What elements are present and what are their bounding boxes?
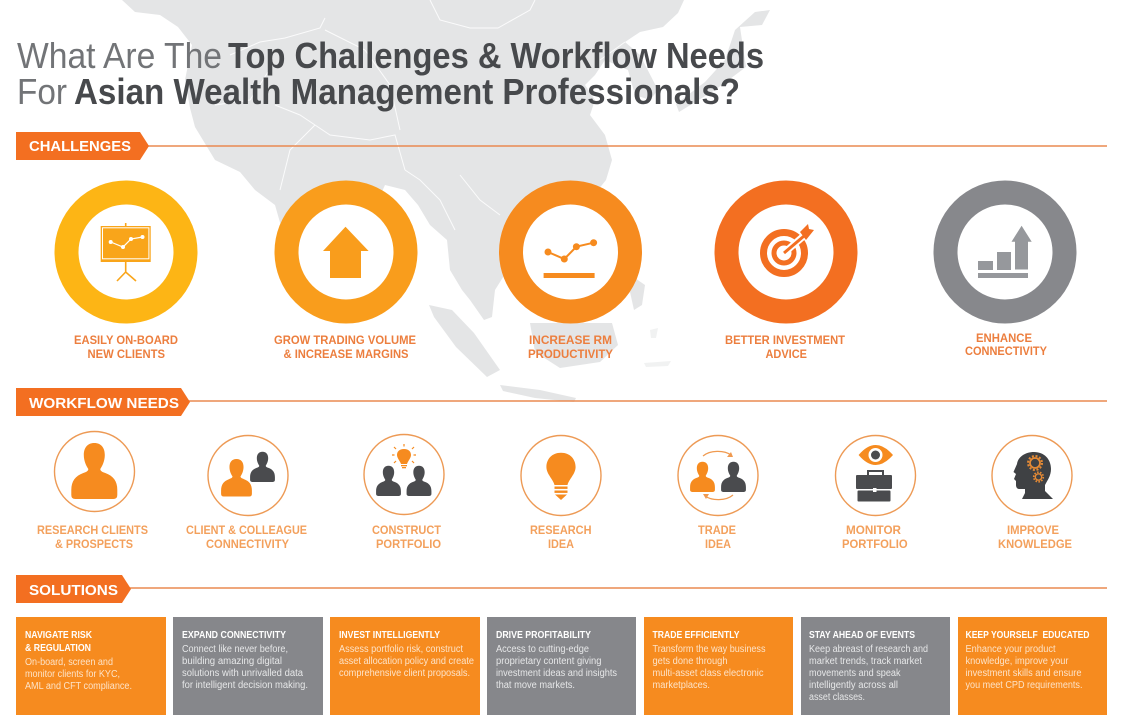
- workflow: improve knowledge: IMPROVE: [1007, 523, 1059, 537]
- panel: invest intelligently: asset allocation policy and create: [339, 656, 474, 667]
- panel: stay ahead of events: movements and speak: [809, 668, 901, 679]
- workflow: client and colleague connectivity: [186, 436, 307, 551]
- icon: two people: [221, 452, 275, 497]
- workflow: research clients and prospects: & PROSPECTS: [55, 537, 133, 551]
- panel: trade efficiently: multi-asset class electronic: [652, 668, 764, 679]
- title: Asian Wealth Management Professionals?: [74, 71, 740, 112]
- section heading: solutions: [16, 575, 1107, 603]
- title: What Are The: [17, 35, 222, 76]
- icon: eye over briefcase: [856, 445, 893, 502]
- workflow: trade idea: IDEA: [705, 537, 731, 551]
- section heading: solutions: SOLUTIONS: [29, 583, 118, 599]
- icon: light bulb: [546, 453, 576, 500]
- panel: trade efficiently: [644, 617, 793, 715]
- panel: expand connectivity: building amazing digital: [182, 656, 282, 667]
- workflow: client and colleague connectivity: CONNECTIVITY: [206, 537, 289, 551]
- panel: drive profitability: Access to cutting-edge: [496, 644, 589, 655]
- panel: navigate risk and regulation: NAVIGATE RISK: [25, 630, 93, 641]
- panel: keep yourself educated: you meet CPD requirements.: [966, 680, 1082, 691]
- panel: drive profitability: investment ideas and insights: [496, 668, 617, 679]
- panel: navigate risk and regulation: & REGULATION: [25, 643, 91, 654]
- title: For: [17, 71, 67, 112]
- panel: trade efficiently: marketplaces.: [652, 680, 710, 691]
- panel: keep yourself educated: [958, 617, 1107, 715]
- panel: drive profitability: that move markets.: [496, 680, 575, 691]
- map country borders: [215, 0, 625, 230]
- icon: presentation board: [101, 223, 151, 281]
- challenge 3: increase RM productivity: INCREASE RM: [529, 333, 612, 347]
- workflow: construct portfolio: [364, 434, 444, 551]
- workflow: trade idea: [678, 436, 758, 551]
- icon: two people exchanging: [690, 451, 746, 500]
- panel: invest intelligently: INVEST INTELLIGENTLY: [339, 630, 440, 641]
- panel: stay ahead of events: intelligently across all: [809, 680, 898, 691]
- icon: person: [71, 443, 117, 499]
- panel: trade efficiently: Transform the way business: [652, 644, 766, 655]
- panel: expand connectivity: solutions with unrivalled data: [182, 668, 303, 679]
- challenge 4: better investment advice: BETTER INVESTMENT: [725, 333, 846, 347]
- panel: stay ahead of events: market trends, track market: [809, 656, 922, 667]
- challenge 1: easily on-board new clients: [66, 192, 186, 361]
- challenge 2: grow trading volume: & INCREASE MARGINS: [284, 347, 408, 361]
- panel: stay ahead of events: asset classes.: [809, 692, 865, 703]
- title: Top Challenges & Workflow Needs: [228, 35, 764, 76]
- workflow: trade idea: TRADE: [698, 523, 736, 537]
- section heading: workflow needs: WORKFLOW NEEDS: [29, 396, 179, 412]
- workflow: monitor portfolio: PORTFOLIO: [842, 537, 908, 551]
- section heading: challenges: CHALLENGES: [29, 139, 131, 155]
- workflow: research idea: IDEA: [548, 537, 574, 551]
- workflow: research idea: [521, 436, 601, 551]
- icon: rising bars: [978, 226, 1032, 278]
- workflow: monitor portfolio: MONITOR: [846, 523, 901, 537]
- workflow: improve knowledge: [992, 436, 1072, 551]
- challenge 4: better investment advice: ADVICE: [766, 347, 807, 361]
- challenge 1: easily on-board new clients: NEW CLIENTS: [88, 347, 165, 361]
- panel: trade efficiently: gets done through: [652, 656, 728, 667]
- icon: two people with light bulb: [376, 444, 431, 496]
- workflow: research clients and prospects: [37, 432, 148, 551]
- workflow: client and colleague connectivity: CLIENT & COLLEAGUE: [186, 523, 307, 537]
- workflow: research clients and prospects: RESEARCH CLIENTS: [37, 523, 148, 537]
- panel: navigate risk and regulation: On-board, screen and: [25, 657, 113, 668]
- challenge 2: grow trading volume: [274, 192, 416, 361]
- icon: target with arrow: [764, 224, 814, 274]
- panel: stay ahead of events: [801, 617, 950, 715]
- panel: navigate risk and regulation: monitor clients for KYC,: [25, 669, 120, 680]
- panel: expand connectivity: [173, 617, 323, 715]
- icon: up arrow: [323, 227, 369, 278]
- panel: keep yourself educated: KEEP YOURSELF EDUCATED: [966, 630, 1090, 641]
- icon: head with gears: [1014, 452, 1053, 499]
- workflow: construct portfolio: PORTFOLIO: [376, 537, 441, 551]
- panel: stay ahead of events: Keep abreast of research and: [809, 644, 928, 655]
- challenge 3: increase RM productivity: PRODUCTIVITY: [528, 347, 613, 361]
- challenge 5: enhance connectivity: CONNECTIVITY: [965, 344, 1047, 358]
- panel: expand connectivity: EXPAND CONNECTIVITY: [182, 630, 286, 641]
- panel: keep yourself educated: investment skills and ensure: [966, 668, 1082, 679]
- challenge 4: better investment advice: [725, 192, 846, 361]
- panel: invest intelligently: [330, 617, 480, 715]
- section heading: challenges: [16, 132, 1107, 160]
- panel: expand connectivity: for intelligent decision making.: [182, 680, 308, 691]
- challenge 2: grow trading volume: GROW TRADING VOLUME: [274, 333, 416, 347]
- panel: trade efficiently: TRADE EFFICIENTLY: [652, 630, 740, 641]
- panel: expand connectivity: Connect like never before,: [182, 644, 288, 655]
- challenge 5: enhance connectivity: ENHANCE: [976, 331, 1032, 345]
- panel: stay ahead of events: STAY AHEAD OF EVENTS: [809, 630, 915, 641]
- challenge 5: enhance connectivity: [946, 192, 1064, 358]
- panel: keep yourself educated: knowledge, improve your: [966, 656, 1069, 667]
- title: [17, 35, 764, 112]
- workflow: construct portfolio: CONSTRUCT: [372, 523, 441, 537]
- workflow: monitor portfolio: [836, 436, 916, 551]
- panel: invest intelligently: Assess portfolio risk, construct: [339, 644, 463, 655]
- panel: navigate risk and regulation: AML and CFT compliance.: [25, 681, 132, 692]
- panel: drive profitability: proprietary content giving: [496, 656, 602, 667]
- workflow: improve knowledge: KNOWLEDGE: [998, 537, 1072, 551]
- challenge 3: increase RM productivity: [511, 192, 630, 361]
- section heading: workflow needs: [16, 388, 1107, 416]
- workflow: research idea: RESEARCH: [530, 523, 592, 537]
- panel: drive profitability: DRIVE PROFITABILITY: [496, 630, 591, 641]
- panel: drive profitability: [487, 617, 636, 715]
- panel: navigate risk and regulation: [16, 617, 166, 715]
- panel: keep yourself educated: Enhance your product: [966, 644, 1056, 655]
- icon: line chart: [544, 239, 597, 278]
- challenge 1: easily on-board new clients: EASILY ON-BOARD: [74, 333, 178, 347]
- background map of Asia: [122, 0, 770, 402]
- panel: invest intelligently: comprehensive client proposals.: [339, 668, 470, 679]
